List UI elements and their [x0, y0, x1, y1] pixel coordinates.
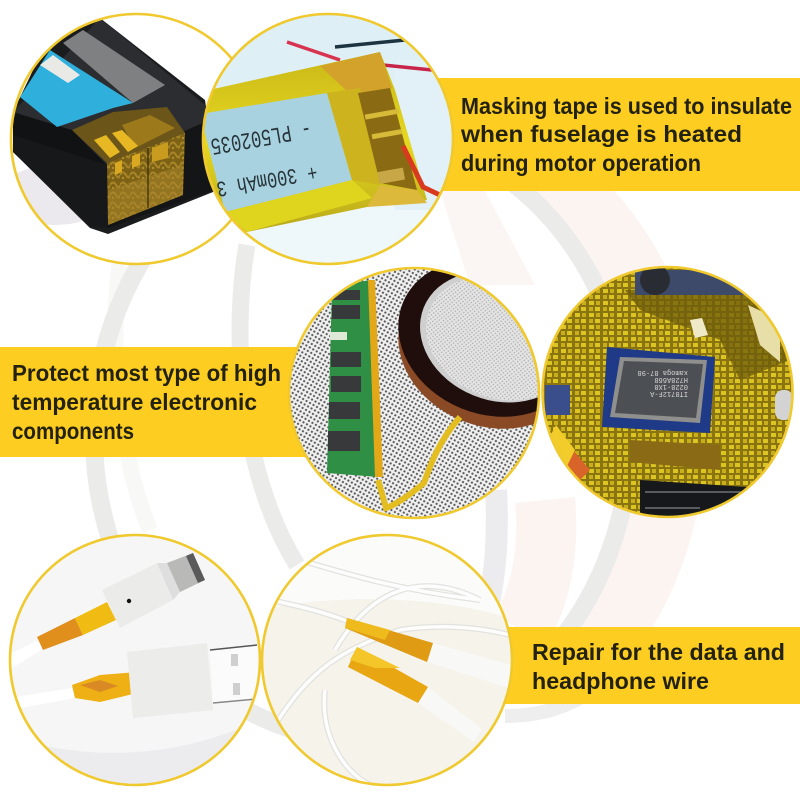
- middle caption text: temperature electronic: [12, 389, 257, 415]
- circle outline: battery: [11, 14, 261, 264]
- panel: bottom caption band: headphone wire: [532, 668, 709, 694]
- middle caption text: [12, 360, 281, 444]
- tape roll: [398, 332, 536, 429]
- background concentric rings: [94, 120, 670, 750]
- panel: battery photo: [13, 20, 214, 263]
- white film wisps: [748, 305, 780, 362]
- tape front: [107, 133, 185, 225]
- panel: middle caption band: [0, 347, 320, 457]
- blue label: [20, 50, 133, 127]
- panel: bottom caption band: [495, 627, 800, 704]
- panel: circuit board photo: IT8712F-A: [649, 389, 688, 397]
- panel: lithium cell photo: + 300mAh 3: [214, 158, 319, 200]
- slot connector: [640, 480, 747, 520]
- panel: headphone wire photo: [255, 530, 525, 790]
- middle caption text: components: [12, 418, 134, 444]
- panel: top caption band: when fuselage is heated: [460, 121, 742, 147]
- grey text label: [63, 30, 165, 103]
- lightning wire and tape: [12, 640, 42, 668]
- tubes: [428, 643, 510, 688]
- panel: top caption band: [430, 78, 800, 191]
- tape pieces: [345, 618, 433, 662]
- panel: circuit board photo: xamoga 87-98: [638, 368, 688, 376]
- panel: RAM and tape roll photo: [288, 266, 540, 520]
- yellow film strip: [378, 417, 460, 508]
- panel: lightning and USB cable photo: [0, 530, 270, 790]
- circuit tab: [358, 88, 417, 190]
- USB wire and tape: [15, 688, 75, 708]
- panel: lithium cell photo: [200, 10, 460, 264]
- RAM stick: [327, 280, 378, 477]
- panel: circuit board photo: [540, 265, 800, 525]
- panel: bottom caption band: Repair for the data and: [532, 639, 785, 665]
- panel: circuit board photo: H728A668: [654, 375, 688, 383]
- panel: top caption band: during motor operation: [461, 150, 701, 176]
- chip: [602, 347, 715, 433]
- tape top: [72, 107, 185, 163]
- middle caption text: Protect most type of high: [12, 360, 281, 386]
- panel: circuit board photo: 0228-1X8: [654, 382, 688, 390]
- cell print: - PL502035: [208, 114, 313, 158]
